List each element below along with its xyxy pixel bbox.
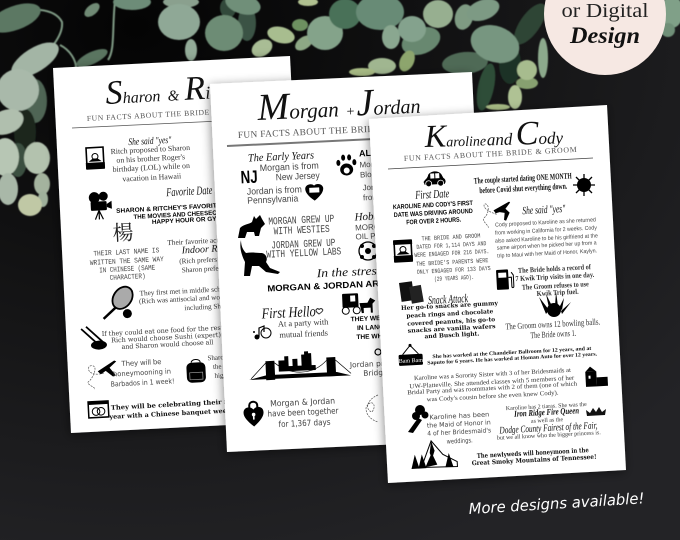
text: work — [427, 346, 598, 366]
foliage: eucalyptus leaves — [0, 0, 680, 216]
text: favorite date — [115, 181, 249, 228]
text: tiaras: Iron Ridge Fire Queen — [513, 405, 579, 419]
text: she said yes: vacation in Hawaii — [122, 171, 182, 184]
icon: small location pin — [375, 349, 381, 355]
divider — [227, 135, 460, 146]
icon: backpack — [186, 359, 206, 383]
text: hometowns — [246, 160, 321, 206]
icon: plane with trail — [483, 202, 511, 228]
text: tiaras: as well as the — [531, 417, 564, 425]
icon: movie camera — [89, 191, 112, 220]
heading: Sharon & Ritch — [104, 68, 233, 112]
text: she said yes: also asked Karoline to be his girlfriend at the — [495, 233, 598, 245]
text: honeymoon: Great Smoky Mountains of Tennessee! — [472, 453, 597, 467]
icon: gas pump — [496, 269, 514, 290]
text: favorite activity — [167, 233, 272, 275]
icon: horse and carriage — [341, 292, 376, 314]
text: first met: They first met in middle school — [139, 285, 230, 298]
icon: New Jersey: NJ — [240, 167, 258, 187]
icon: chopsticks — [81, 326, 107, 350]
icon: mountains — [410, 440, 457, 469]
text: about pets: from — [363, 193, 380, 202]
icon: hanging sign: Bam Bam — [399, 358, 423, 365]
text: one food: If they could eat one food for the rest of — [102, 323, 232, 338]
text: about pets — [359, 146, 413, 202]
text: she said yes: same airport when he picked her up from a — [497, 240, 598, 252]
text: first date: First Date — [414, 186, 450, 202]
text: honeymoon: Barbados in 1 week! — [110, 377, 175, 389]
text: dogs: WITH WESTIES — [274, 224, 330, 238]
text: together days — [267, 395, 340, 430]
icon: hanging sign — [398, 344, 423, 366]
badge: or Digital Design: or Digital — [562, 0, 649, 22]
text: first met — [138, 285, 237, 315]
text: last name: WRITTEN THE SAME WAY — [90, 256, 165, 268]
icon: Brooklyn Bridge skyline — [248, 349, 351, 381]
text: maid of honor — [426, 410, 492, 447]
heading: Morgan + Jordan: Morgan — [256, 83, 339, 129]
text: snack attack: Her go-to snacks are gummy — [401, 300, 499, 312]
icon: soccer ball — [359, 242, 377, 260]
icon: heart — [305, 184, 324, 201]
text: favorite date: HAPPY HOUR OR GYU-K — [152, 215, 228, 226]
text: honeymoon: The newlyweds will honeymoon in the — [477, 446, 589, 460]
text: dogs: JORDAN GREW UP — [271, 238, 336, 252]
text: about pets: Jordan — [362, 182, 387, 192]
text: tiaras: Dodge County Fairest of the Fair, — [499, 420, 598, 437]
badge: or Digital Design — [544, 0, 666, 75]
text: Sharon note — [207, 353, 229, 380]
text: hometowns: Pennsylvania — [247, 193, 299, 206]
text: dating — [474, 170, 573, 196]
text: hobbies: Hobbies — [353, 210, 392, 224]
text: carriage: THE WHOLE — [356, 332, 397, 341]
text: about pets: ALL ABOUT — [359, 146, 411, 158]
text: Kwik Trip: Kwik Trip fuel. — [536, 287, 579, 298]
text: bowling — [505, 317, 601, 341]
text: snack attack: covered peanuts, his go-to — [407, 316, 495, 328]
text: Sharon note: high — [214, 371, 228, 380]
text: work: She has worked at the Chandelier Ballroom for 12 years, and at — [432, 346, 592, 360]
text: dated days: WERE ENGAGED FOR 216 DAYS. — [414, 248, 489, 259]
text: hobbies — [353, 210, 394, 241]
heading: Karoline and Cody — [423, 114, 564, 155]
text: dogs: MORGAN GREW UP — [268, 214, 335, 229]
text: Kwik Trip: 7 Kwik Trip visits in one day. — [515, 270, 595, 283]
divider — [72, 118, 284, 128]
icon: yellow lab — [240, 240, 280, 276]
text: one food: and Sharon would choose all — [121, 338, 214, 351]
text: dating: before Covid shut everything down. — [479, 181, 567, 195]
icon: westie — [238, 215, 265, 238]
text: she said yes: from working in California for 2 weeks. Cody — [495, 225, 597, 237]
text: first hello — [261, 303, 330, 341]
badge: or Digital Design: Design — [569, 23, 640, 48]
text: Sharon note: Sharon — [207, 353, 228, 362]
text: tiaras: but we all know who the bigger princess is. — [497, 430, 601, 442]
text: maid of honor: the Maid of Honor in — [427, 418, 491, 430]
text: tiaras — [495, 401, 601, 442]
icon: heart padlock — [243, 401, 264, 427]
icon: castle — [585, 366, 608, 387]
text: last name — [89, 247, 165, 284]
panel: Karoline and Cody card — [369, 105, 626, 483]
text: sorority — [406, 367, 579, 404]
icon: paw print — [336, 154, 357, 176]
divider — [388, 158, 593, 169]
icon: ring box — [393, 240, 413, 262]
subtitle: FUN FACTS ABOUT THE BRIDE & GROOM — [404, 145, 577, 163]
text: favorite date: Favorite Date — [165, 183, 213, 199]
text: honeymoon — [109, 357, 175, 389]
text: about pets: Blonde — [360, 169, 386, 179]
text: dated days: THE BRIDE'S PARENTS WERE — [416, 257, 489, 268]
text: snack attack — [400, 289, 500, 342]
text: she said yes: Ritch proposed to Sharon — [110, 143, 190, 156]
text: she said yes: on his brother Roger's — [116, 152, 185, 165]
text: bowling: The Bride owns 1. — [530, 328, 576, 340]
text: banquet — [108, 396, 261, 421]
text: honeymoon: honeymooning in — [113, 367, 171, 379]
text: hometowns: New Jersey — [276, 170, 320, 182]
text: first date — [392, 185, 474, 227]
subtitle: FUN FACTS ABOUT THE BRIDE & GROOM — [87, 105, 252, 123]
text: dated days: (29 YEARS AGO). — [434, 274, 474, 283]
text: snack attack: peach rings and chocolate — [406, 308, 494, 320]
text: first date: KAROLINE AND CODY'S FIRST — [393, 200, 473, 211]
text: she said yes — [493, 201, 599, 260]
text: favorite activity: (Rich prefers bouldering, — [179, 254, 252, 266]
icon: snacks — [399, 281, 424, 304]
text: work: Saputo for 6 years. He has worked at Homan Auto for over 12 years. — [427, 352, 598, 366]
heading: Sharon & Ritch: Ritch — [182, 68, 233, 108]
text: first met: (Rich was antisocial and would — [139, 293, 230, 306]
heading: Morgan + Jordan: + — [345, 105, 356, 120]
text: maid of honor: weddings. — [446, 436, 473, 446]
text: favorite activity: Indoor Rock Climbing — [180, 241, 271, 256]
text: she said yes: She said "yes" — [128, 135, 172, 148]
text: hobbies: OIL PAINT — [355, 231, 394, 241]
text: favorite date: THE MOVIES AND CHEESECAKE — [133, 209, 230, 221]
icon: Chinese character: 楊 — [112, 220, 134, 246]
text: last name: IN CHINESE (SAME — [99, 265, 155, 275]
text: together days: for 1,367 days — [278, 417, 331, 429]
text: one food: Rich would choose Sushi (expert) — [111, 331, 222, 345]
text: snack attack: and Busch light. — [424, 330, 480, 340]
text: Kwik Trip: The Bride holds a record of — [518, 262, 592, 275]
text: dogs: WITH YELLOW LABS — [266, 246, 342, 262]
text: carriage: IN LANCASTER — [357, 323, 406, 332]
icon: bowling pins and ball — [539, 292, 571, 317]
text: tiaras: Karoline has 2 tiaras. She was the — [506, 402, 587, 412]
text: one food — [102, 323, 233, 352]
text: she said yes: birthday (LOL) while on — [112, 161, 190, 174]
heading: Karoline and Cody: Cody — [515, 114, 564, 153]
text: favorite activity: Sharon prefers ropes) — [182, 263, 244, 274]
text: she said yes: She said "yes" — [522, 203, 566, 217]
subtitle: FUN FACTS ABOUT THE BRIDE & GROOM — [238, 122, 431, 141]
panel: Morgan and Jordan card — [210, 72, 489, 452]
text: honeymoon — [471, 446, 597, 467]
heading: Karoline and Cody: and — [487, 130, 513, 149]
text: honeymoon: They will be — [120, 358, 162, 368]
text: favorite activity: Their favorite activity is — [167, 234, 239, 247]
text: bowling: The Groom owns 12 bowling balls. — [505, 317, 600, 331]
text: first hello: At a party with — [278, 317, 329, 329]
text: snack attack: snacks are vanilla wafers — [408, 323, 496, 335]
heading: Morgan + Jordan — [256, 80, 421, 129]
icon: plane with dashed trail — [87, 360, 118, 390]
icon: crown — [586, 407, 606, 416]
text: together days: have been together — [267, 405, 339, 419]
text: first met: including Sharon) — [184, 302, 237, 312]
heading: Morgan + Jordan: Jordan — [355, 80, 421, 124]
panel: Sharon and Ritch card — [53, 56, 308, 433]
icon: heart outline — [316, 309, 323, 314]
text: dated days: DATED FOR 1,114 DAYS AND — [416, 240, 487, 251]
icon: tennis racket — [102, 282, 138, 319]
text: she said yes — [110, 134, 192, 184]
text: in the stress — [266, 262, 417, 293]
text: favorite date: SHARON & RITCHEY'S FAVORITE DATE IS — [116, 201, 248, 215]
text: sorority: Karoline was a Sorority Sister with 3 of her Bridesmaids at — [414, 367, 571, 382]
icon: calendar with rings — [88, 401, 109, 418]
text: last name: CHARACTER) — [109, 273, 146, 283]
text: dated days — [413, 232, 491, 284]
text: hobbies: MORGAN — [355, 222, 391, 232]
text: first date: FOR OVER 2 HOURS. — [406, 217, 461, 226]
text: maid of honor: 4 of her Bridesmaid's — [427, 426, 492, 438]
text: about pets: Morgan — [359, 159, 387, 169]
text: carriage: THEY WENT — [350, 315, 389, 323]
text: last name: THEIR LAST NAME IS — [93, 247, 160, 259]
text: Kwik Trip — [515, 262, 595, 299]
heading: Sharon & Ritch: Sharon — [104, 72, 161, 112]
text: dated days: THE BRIDE AND GROOM — [421, 232, 481, 243]
icon: car — [423, 171, 446, 187]
text: first date: DATE WAS DRIVING AROUND — [394, 208, 473, 219]
text: in the stress: MORGAN & JORDAN ARE GOOD — [267, 277, 417, 293]
text: Kwik Trip: The Groom refuses to use — [522, 279, 590, 292]
text: sorority: Bridal Party and was roommates with 2 of them (one of which — [407, 381, 578, 396]
text: banquet: year with a Chinese banquet week — [108, 407, 232, 421]
text: bridge: Jordan proposed — [349, 358, 411, 369]
text: she said yes: Cody proposed to Karoline as she returned — [495, 217, 596, 229]
text: snack attack: Snack Attack — [428, 291, 469, 307]
text: bridge: Bridge — [363, 368, 388, 378]
text: in the stress: In the stress: — [315, 263, 387, 280]
icon: virus — [573, 174, 595, 196]
icon: plane trail — [366, 395, 378, 422]
text: together days: Morgan & Jordan — [270, 396, 335, 408]
text: maid of honor: Karoline has been — [429, 410, 490, 422]
text: hometowns: Morgan is from — [260, 160, 319, 173]
text: banquet: They will be celebrating their milestone — [111, 396, 261, 412]
heading: Karoline and Cody: Karoline — [423, 116, 486, 154]
text: first hello: First Hello — [261, 304, 316, 323]
text: sorority: UW-Platteville. She attended classes with 5 members of her — [409, 375, 575, 390]
text: Sharon note: the — [213, 363, 222, 371]
icon: music notes — [253, 326, 271, 340]
text: hometowns: Jordan is from — [247, 184, 302, 197]
text: the early years: The Early Years — [248, 150, 314, 164]
text: she said yes: trip to Maui with her Maid of Honor, Kaylyn. — [497, 248, 598, 260]
text: dating: The couple started dating ONE MONTH — [474, 170, 572, 186]
text: bridge — [349, 358, 412, 378]
icon: bouquet — [408, 405, 428, 433]
text: sorority: was Cody's cousin before she even knew Cody). — [427, 390, 559, 403]
heading: Sharon & Ritch: & — [167, 88, 180, 105]
caption: more designs: More designs available! — [468, 489, 645, 518]
text: dated days: ONLY ENGAGED FOR 133 DAYS — [417, 265, 491, 276]
text: first hello: mutual friends — [279, 329, 328, 340]
text: dogs — [265, 213, 342, 262]
icon: ring box — [85, 147, 105, 169]
text: carriage — [350, 314, 407, 341]
